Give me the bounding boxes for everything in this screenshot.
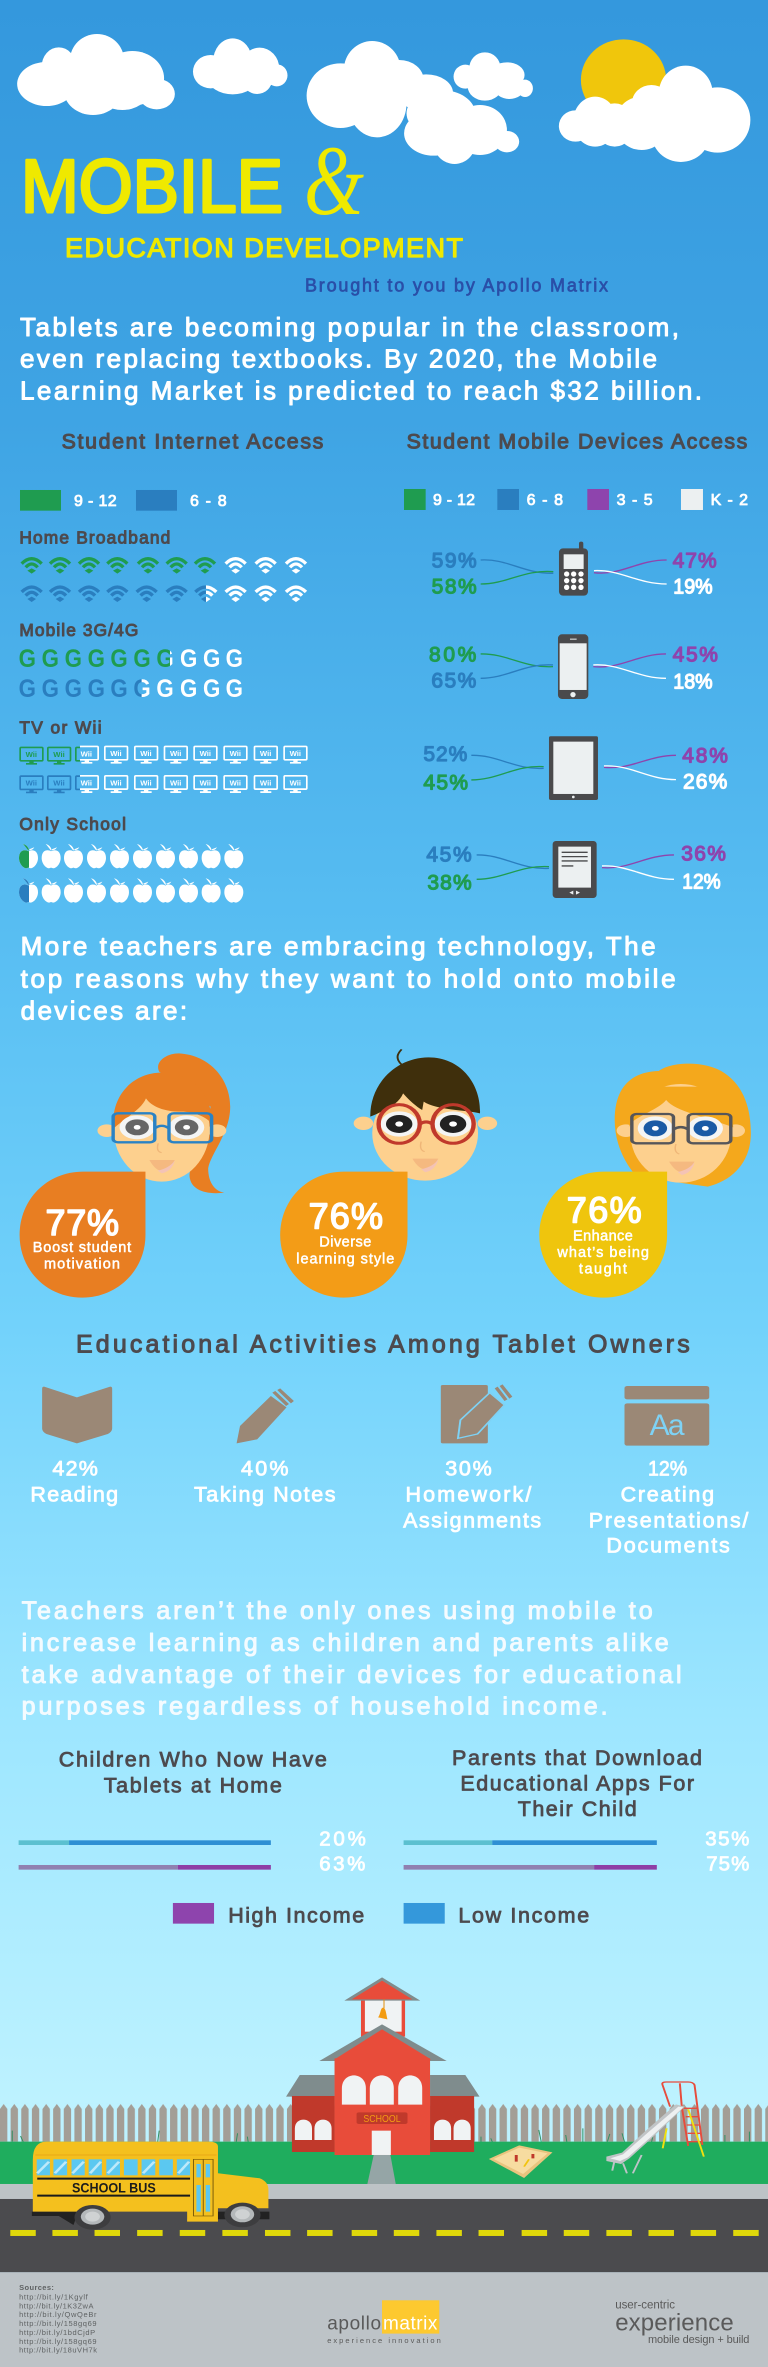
header illustration: sun and clouds bbox=[17, 34, 750, 164]
sources: http://bit.ly/158gq69 bbox=[19, 2319, 97, 2328]
chart: mobile G letters: G bbox=[65, 645, 82, 673]
label: mobile 3G/4G: Mobile 3G/4G bbox=[19, 620, 138, 640]
chart row: e-reader: 36% bbox=[681, 843, 726, 866]
icon: sun bbox=[581, 39, 666, 121]
chart: tv or wii monitors: Wii bbox=[110, 749, 122, 758]
tagline: experience bbox=[615, 2310, 734, 2337]
stat: presentations: Documents bbox=[606, 1534, 730, 1558]
chart: only school apples bbox=[19, 844, 243, 903]
chart: tv or wii monitors: Wii bbox=[290, 778, 301, 787]
callout text: 77% boost student motivation: motivation bbox=[44, 1257, 120, 1273]
heading: parents downloading apps: Parents that Download bbox=[452, 1746, 702, 1770]
heading: parents downloading apps bbox=[452, 1746, 702, 1821]
legend: K - 2 bbox=[711, 492, 748, 509]
intro text: Tablets are becoming popular in the classroom, bbox=[20, 312, 679, 342]
chart: tv or wii monitors: Wii bbox=[290, 749, 301, 758]
logo: apollo matrix: matrix bbox=[383, 2313, 438, 2334]
legend bbox=[404, 489, 748, 510]
footer panel bbox=[0, 2272, 768, 2367]
callout text: 76% diverse learning style: 76% bbox=[309, 1195, 383, 1236]
chart: tv or wii monitors: Wii bbox=[200, 778, 211, 787]
chart: mobile G letters: G bbox=[156, 675, 174, 703]
icon: cloud 3 bbox=[307, 41, 519, 164]
title ampersand: & bbox=[304, 125, 364, 236]
legend: income bbox=[173, 1903, 589, 1928]
logo: apollo matrix bbox=[327, 2300, 441, 2345]
stat: reading bbox=[30, 1457, 118, 1507]
icon: feature phone bbox=[559, 542, 588, 596]
chart row: tablet: 45% bbox=[423, 771, 468, 794]
chart: tv or wii monitors: Wii bbox=[140, 749, 152, 758]
paragraph: children and parents: take advantage of their devices for educational bbox=[22, 1661, 682, 1689]
panel: student internet access bbox=[19, 430, 323, 903]
chart: home broadband wifi icons bbox=[22, 559, 306, 602]
stat: taking notes: Taking Notes bbox=[194, 1483, 336, 1507]
bar chart: parents: 75% bbox=[706, 1852, 749, 1875]
paragraph: children and parents: increase learning as children and parents alike bbox=[22, 1629, 669, 1657]
bar chart: children: 20% bbox=[319, 1827, 366, 1850]
chart: tv or wii monitors: Wii bbox=[230, 749, 241, 758]
paragraph: teachers embracing technology: More teachers are embracing technology, The bbox=[21, 931, 656, 961]
icon: pencil bbox=[237, 1388, 294, 1443]
callout text: 76% diverse learning style bbox=[296, 1195, 394, 1267]
intro text: even replacing textbooks. By 2020, the Mobile bbox=[20, 344, 657, 374]
chart: tv or wii monitors: Wii bbox=[200, 749, 211, 758]
stat: taking notes bbox=[194, 1457, 336, 1507]
stat: reading: Reading bbox=[30, 1483, 118, 1507]
stat: presentations bbox=[589, 1457, 748, 1558]
icon: cloud 1 bbox=[17, 34, 175, 115]
chart: tv or wii monitors: Wii bbox=[230, 778, 241, 787]
school path bbox=[367, 2155, 396, 2184]
grass bbox=[0, 2142, 768, 2184]
illustration: school scene bbox=[0, 1977, 768, 2272]
heading: Student Mobile Devices Access bbox=[407, 430, 747, 454]
chart row: tablet: 52% bbox=[423, 743, 467, 766]
callout text: 76% enhance what's being taught: 76% bbox=[567, 1189, 642, 1230]
stat: homework: 30% bbox=[445, 1457, 492, 1481]
label: home broadband: Home Broadband bbox=[19, 527, 170, 547]
legend: 9 - 12 bbox=[433, 492, 475, 509]
chart: mobile G letters: G bbox=[42, 675, 59, 703]
heading: children with tablets: Children Who Now Have bbox=[59, 1748, 327, 1772]
tagline: user-centric bbox=[615, 2299, 675, 2311]
sources: http://bit.ly/18uVH7k bbox=[19, 2346, 97, 2355]
callout text: 77% boost student motivation bbox=[33, 1202, 131, 1273]
logo: apollo matrix: apollo bbox=[327, 2313, 381, 2334]
callout text: 76% enhance what's being taught: Enhance bbox=[573, 1228, 633, 1244]
heading: parents downloading apps: Educational Apps For bbox=[460, 1772, 694, 1796]
sidewalk bbox=[0, 2184, 768, 2199]
bar chart: children: 63% bbox=[319, 1852, 365, 1875]
chart: tv or wii monitors: Wii bbox=[53, 750, 65, 759]
paragraph: teachers embracing technology: top reasons why they want to hold onto mobile bbox=[21, 963, 676, 993]
tagline bbox=[615, 2299, 749, 2346]
school building: SCHOOL bbox=[363, 2113, 401, 2124]
sources: http://bit.ly/1bdCjdP bbox=[19, 2328, 95, 2337]
chart: mobile G letters: G bbox=[133, 675, 151, 703]
illustration: blonde teacher bbox=[615, 1064, 751, 1187]
chart row: smartphone: 45% bbox=[673, 643, 718, 666]
chart: mobile G letters: G bbox=[203, 675, 220, 703]
chart: mobile G letters: G bbox=[133, 675, 151, 703]
subtitle: EDUCATION DEVELOPMENT bbox=[65, 233, 463, 263]
chart row: smartphone: 80% bbox=[429, 644, 476, 667]
byline: Brought to you by Apollo Matrix bbox=[305, 276, 608, 296]
sources: http://bit.ly/1Kgylf bbox=[19, 2292, 89, 2301]
icon: smartphone bbox=[558, 634, 588, 699]
paragraph: teachers embracing technology: devices are: bbox=[21, 995, 187, 1025]
chart row: e-reader bbox=[426, 841, 726, 898]
paragraph: children and parents bbox=[22, 1597, 682, 1720]
icon: cloud 5 bbox=[559, 66, 750, 162]
callout text: 77% boost student motivation: 77% bbox=[46, 1202, 119, 1243]
illustration: redhead teacher bbox=[97, 1053, 230, 1193]
chart: tv or wii monitors: Wii bbox=[260, 749, 271, 758]
callout shape: 76% enhance bbox=[539, 1172, 667, 1298]
sources: http://bit.ly/158gq69 bbox=[19, 2337, 97, 2346]
chart row: feature phone: 47% bbox=[673, 550, 717, 573]
chart: mobile G letters bbox=[20, 649, 242, 697]
chart: mobile G letters: G bbox=[19, 675, 36, 703]
logo: apollo matrix: experience innovation bbox=[327, 2336, 441, 2345]
stat: presentations: Presentations/ bbox=[589, 1508, 748, 1532]
icon: cloud 2 bbox=[193, 38, 288, 94]
chart row: feature phone: 19% bbox=[673, 575, 713, 598]
intro text: Learning Market is predicted to reach $32 billion. bbox=[20, 375, 702, 405]
chart: mobile G letters: G bbox=[226, 675, 243, 703]
road bbox=[0, 2199, 768, 2272]
chart: mobile G letters: G bbox=[180, 645, 197, 673]
chart row: e-reader: 45% bbox=[426, 844, 472, 867]
chart row: tablet bbox=[423, 736, 728, 800]
activity icons bbox=[42, 1384, 709, 1446]
chart: tv or wii monitors: Wii bbox=[81, 779, 92, 788]
icon: book bbox=[42, 1387, 112, 1443]
icon label: Aa: Aa bbox=[650, 1409, 685, 1442]
chart: mobile G letters: G bbox=[42, 645, 59, 673]
chart: tv or wii monitors: Wii bbox=[170, 778, 181, 787]
legend: income: High Income bbox=[228, 1904, 364, 1928]
heading: Student Internet Access bbox=[62, 430, 323, 454]
chart: mobile G letters: G bbox=[19, 645, 36, 673]
legend bbox=[20, 490, 227, 511]
illustration: boy with glasses bbox=[354, 1049, 497, 1181]
callout text: 76% diverse learning style: learning style bbox=[296, 1251, 394, 1267]
chart row: smartphone bbox=[429, 634, 718, 699]
chart: mobile G letters: G bbox=[110, 645, 128, 673]
chart: mobile G letters: G bbox=[110, 675, 128, 703]
icon: tablet bbox=[549, 736, 598, 800]
chart: tv or wii monitors: Wii bbox=[170, 749, 181, 758]
chart: tv or wii monitors: Wii bbox=[110, 778, 122, 787]
chart: mobile G letters: G bbox=[180, 675, 197, 703]
icon: document bbox=[624, 1386, 709, 1446]
chart: tv or wii monitors: Wii bbox=[53, 779, 65, 788]
legend: 6 - 8 bbox=[190, 493, 227, 510]
chart: tv or wii monitors: Wii bbox=[81, 749, 92, 758]
bar chart: parents: 35% bbox=[705, 1827, 749, 1850]
panel: student mobile devices access bbox=[404, 430, 748, 898]
legend: 9 - 12 bbox=[74, 493, 117, 510]
callout text: 76% enhance what's being taught: taught bbox=[579, 1261, 627, 1277]
intro text bbox=[20, 312, 702, 405]
grass tufts bbox=[12, 2128, 749, 2146]
icon: slide bbox=[606, 2082, 704, 2173]
sources: http://bit.ly/QwQeBr bbox=[19, 2310, 97, 2319]
legend: income: Low Income bbox=[458, 1904, 589, 1928]
stat: homework: Homework/ bbox=[406, 1483, 531, 1507]
stat: presentations: Creating bbox=[621, 1483, 714, 1507]
callout text: 76% enhance what's being taught bbox=[556, 1189, 649, 1277]
label: tv or wii: TV or Wii bbox=[19, 717, 102, 737]
callout text: 76% enhance what's being taught: what’s being bbox=[556, 1245, 649, 1261]
school building bbox=[286, 1977, 480, 2155]
chart row: smartphone: 18% bbox=[673, 670, 713, 693]
icon: sandbox bbox=[489, 2145, 552, 2178]
bar chart: parents bbox=[404, 1827, 749, 1875]
chart: mobile G letters: G bbox=[156, 645, 174, 673]
callout text: 77% boost student motivation: Boost student bbox=[33, 1240, 131, 1256]
heading: educational activities: Educational Activities Among Tablet Owners bbox=[76, 1331, 690, 1359]
stat: homework: Assignments bbox=[403, 1508, 541, 1532]
chart: mobile G letters: G bbox=[65, 675, 82, 703]
chart: tv or wii monitors bbox=[20, 746, 307, 793]
legend: 3 - 5 bbox=[617, 492, 653, 509]
stat: taking notes: 40% bbox=[241, 1457, 288, 1481]
label: only school: Only School bbox=[19, 814, 126, 834]
chart: mobile G letters: G bbox=[88, 645, 105, 673]
chart row: feature phone bbox=[432, 542, 717, 598]
chart: mobile G letters: G bbox=[88, 675, 105, 703]
bar chart: children bbox=[19, 1827, 366, 1875]
icon: homework bbox=[441, 1384, 512, 1443]
paragraph: children and parents: purposes regardless of household income. bbox=[22, 1692, 608, 1720]
heading: parents downloading apps: Their Child bbox=[518, 1797, 637, 1821]
stat: reading: 42% bbox=[52, 1457, 98, 1481]
chart: tv or wii monitors: Wii bbox=[26, 779, 37, 788]
sources: http://bit.ly/1K3ZwA bbox=[19, 2301, 94, 2310]
chart row: e-reader: 38% bbox=[427, 871, 472, 894]
paragraph: children and parents: Teachers aren’t the only ones using mobile to bbox=[22, 1597, 653, 1625]
legend: 6 - 8 bbox=[527, 492, 563, 509]
road dashes bbox=[10, 2230, 759, 2236]
chart: tv or wii monitors: Wii bbox=[26, 750, 37, 759]
chart row: feature phone: 59% bbox=[432, 550, 477, 573]
stat: homework bbox=[403, 1457, 541, 1532]
title: MOBILE bbox=[21, 144, 283, 228]
icon: e-reader bbox=[553, 841, 597, 898]
chart: tv or wii monitors: Wii bbox=[260, 778, 271, 787]
chart: mobile G letters: G bbox=[226, 645, 243, 673]
paragraph: teachers embracing technology bbox=[21, 931, 676, 1025]
tagline: mobile design + build bbox=[648, 2334, 749, 2346]
heading: children with tablets bbox=[59, 1748, 327, 1797]
sources: Sources: bbox=[19, 2283, 54, 2292]
chart row: feature phone: 58% bbox=[432, 575, 477, 598]
callout text: 76% diverse learning style: Diverse bbox=[319, 1235, 371, 1251]
icon: school bus: SCHOOL BUS bbox=[72, 2180, 156, 2195]
chart row: tablet: 48% bbox=[682, 744, 728, 767]
icon: cloud 4 bbox=[454, 52, 533, 101]
icon: school bus bbox=[32, 2142, 269, 2230]
chart: mobile G letters: G bbox=[133, 645, 151, 673]
chart: mobile G letters: G bbox=[156, 645, 174, 673]
chart row: e-reader: 12% bbox=[682, 870, 721, 893]
heading: children with tablets: Tablets at Home bbox=[104, 1773, 282, 1797]
chart row: smartphone: 65% bbox=[431, 669, 476, 692]
fence bbox=[0, 2104, 768, 2142]
callout shape: 76% diverse bbox=[280, 1172, 408, 1298]
chart: tv or wii monitors: Wii bbox=[140, 778, 152, 787]
chart: mobile G letters: G bbox=[203, 645, 220, 673]
stat: presentations: 12% bbox=[648, 1457, 687, 1481]
callout shape: 77% bbox=[20, 1172, 145, 1298]
illustrations: teachers and bubbles bbox=[20, 1049, 751, 1298]
sources bbox=[19, 2283, 97, 2355]
chart row: tablet: 26% bbox=[683, 770, 727, 793]
